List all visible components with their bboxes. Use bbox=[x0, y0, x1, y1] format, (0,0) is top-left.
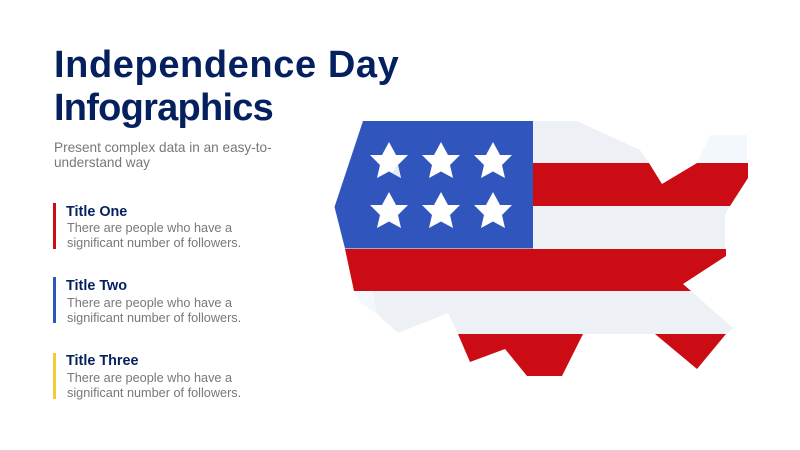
text: title one: significant number of followers. bbox=[67, 236, 241, 250]
accent bar: red bbox=[53, 203, 56, 249]
pale northeast piece bbox=[697, 135, 747, 163]
star 4 bbox=[370, 192, 408, 228]
heading: title two: Title Two bbox=[66, 278, 127, 294]
red stripe 5 east bbox=[655, 334, 726, 369]
pale southwest piece bbox=[354, 291, 377, 314]
heading: title three: Title Three bbox=[66, 353, 139, 369]
text: title three: significant number of followers. bbox=[67, 386, 241, 400]
text: title one bbox=[67, 221, 241, 250]
heading: title one: Title One bbox=[66, 204, 127, 220]
subtitle: understand way bbox=[54, 155, 150, 170]
subtitle bbox=[54, 140, 272, 170]
blue canton bbox=[334, 121, 533, 248]
title bbox=[54, 44, 399, 129]
accent bar: yellow bbox=[53, 353, 56, 399]
stars bbox=[370, 142, 512, 228]
title: Independence Day bbox=[54, 44, 399, 86]
item: title two bbox=[53, 277, 241, 325]
star 6 bbox=[474, 192, 512, 228]
pale stripe 2 bbox=[533, 206, 730, 249]
star 3 bbox=[474, 142, 512, 178]
title: Infographics bbox=[54, 87, 273, 129]
text: title two bbox=[67, 296, 241, 325]
accent bar: blue bbox=[53, 277, 56, 323]
red stripe 1 bbox=[533, 163, 748, 206]
subtitle: Present complex data in an easy-to- bbox=[54, 140, 272, 155]
star 5 bbox=[422, 192, 460, 228]
text: title three: There are people who have a bbox=[67, 371, 232, 385]
text: title two: significant number of followers. bbox=[67, 311, 241, 325]
text: title three bbox=[67, 371, 241, 400]
top pale stripe bbox=[533, 121, 649, 163]
red stripe 3 bbox=[345, 249, 726, 291]
star 2 bbox=[422, 142, 460, 178]
pale stripe 4 bbox=[372, 291, 733, 334]
item: title one bbox=[53, 203, 241, 250]
red stripe 5 west bbox=[458, 334, 583, 376]
item: title three bbox=[53, 353, 241, 400]
star 1 bbox=[370, 142, 408, 178]
text: title one: There are people who have a bbox=[67, 221, 232, 235]
text: title two: There are people who have a bbox=[67, 296, 232, 310]
